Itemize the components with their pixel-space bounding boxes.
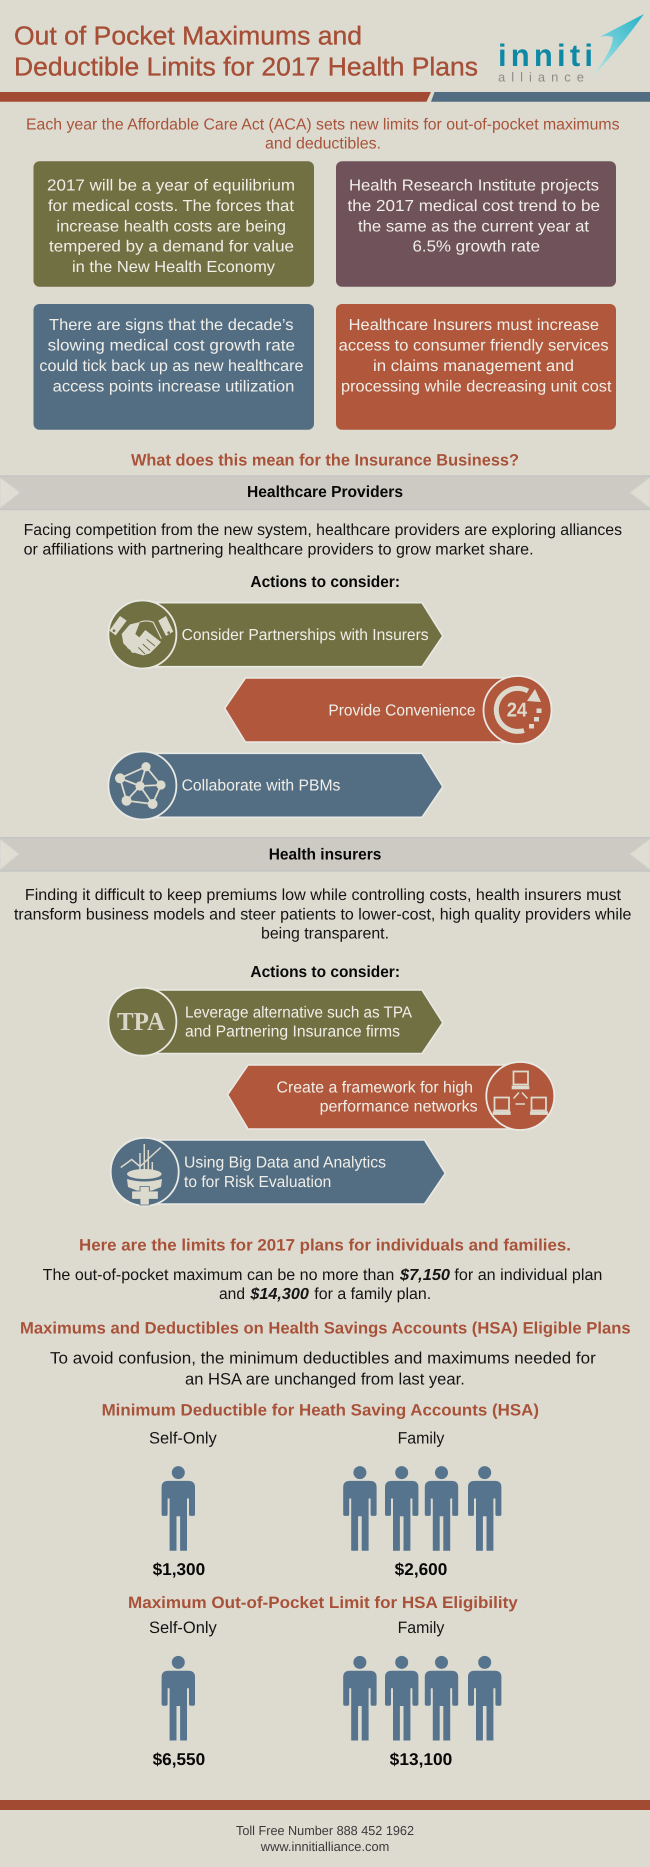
arrow: TPA: Leverage alternative such as TPA — [185, 1004, 412, 1021]
footer contact: www.innitialliance.com — [260, 1839, 389, 1854]
heading: minimum deductible: Minimum Deductible for Heath Saving Accounts (HSA) — [102, 1402, 539, 1420]
arrow: TPA: and Partnering Insurance firms — [185, 1024, 400, 1041]
arrow: framework — [228, 1062, 554, 1130]
heading: maximum out-of-pocket limit: Maximum Out-of-Pocket Limit for HSA Eligibility — [128, 1594, 519, 1612]
icon: connected computers — [493, 1072, 548, 1115]
text: providers description: or affiliations with partnering healthcare providers to grow market share. — [24, 542, 534, 559]
icon: handshake — [109, 616, 173, 655]
header divider bar — [0, 92, 650, 102]
arrow: convenience: Provide Convenience — [328, 702, 476, 719]
chart: maximum limit family — [343, 1619, 501, 1769]
chart: maximum limit family: Family — [398, 1619, 445, 1637]
text: insurers description: Finding it difficult to keep premiums low while controlling costs, health insurers must — [25, 887, 622, 904]
panel: equilibrium: increase health costs are being — [56, 218, 286, 235]
arrow: TPA — [108, 988, 443, 1056]
heading: limits for 2017 plans: Here are the limits for 2017 plans for individuals and families. — [79, 1236, 571, 1254]
panel: equilibrium: in the New Health Economy — [72, 259, 275, 276]
arrow: big data: Using Big Data and Analytics — [184, 1155, 386, 1172]
chart: maximum limit self-only — [149, 1619, 218, 1769]
logo: inniti alliance — [498, 14, 644, 85]
arrow: partnerships: Consider Partnerships with Insurers — [182, 627, 429, 644]
heading: actions to consider: Actions to consider: — [250, 574, 400, 591]
chart: minimum deductible family — [343, 1429, 501, 1579]
panel: insurers — [336, 304, 616, 430]
panel: research institute: Health Research Institute projects — [349, 178, 599, 195]
banner: healthcare providers: Healthcare Providers — [247, 484, 403, 501]
chart: maximum limit family: $13,100 — [390, 1750, 452, 1769]
text: out-of-pocket maximums: for a family plan. — [314, 1286, 431, 1303]
chart: minimum deductible self-only — [149, 1429, 218, 1579]
text: avoid confusion: To avoid confusion, the minimum deductibles and maximums needed for — [50, 1350, 596, 1368]
panel: insurers: Healthcare Insurers must increase — [349, 317, 599, 334]
chart: minimum deductible family: $2,600 — [395, 1560, 447, 1579]
icon: analytics — [121, 1144, 162, 1205]
panel: research institute: 6.5% growth rate — [412, 239, 540, 256]
arrow: PBMs: Collaborate with PBMs — [182, 778, 340, 795]
arrow: PBMs — [108, 752, 443, 820]
text: out-of-pocket maximums: $14,300 — [249, 1286, 309, 1303]
arrow: partnerships — [108, 600, 443, 668]
arrow: convenience — [225, 676, 551, 744]
chart: maximum limit self-only: $6,550 — [153, 1750, 205, 1769]
banner: health insurers: Health insurers — [269, 846, 381, 863]
panel: insurers: in claims management and — [373, 358, 574, 375]
text: avoid confusion — [50, 1350, 596, 1388]
panel: equilibrium — [34, 161, 314, 287]
banner: health insurers — [0, 838, 650, 871]
text: avoid confusion: an HSA are unchanged from last year. — [185, 1370, 465, 1388]
panel: insurers: access to consumer friendly services — [339, 338, 609, 355]
panel: slowing growth: access points increase utilization — [53, 379, 294, 396]
chart: maximum limit self-only: Self-Only — [149, 1619, 218, 1637]
text: providers description: Facing competition from the new system, healthcare providers are exploring alliances — [24, 522, 622, 539]
footer contact: Toll Free Number 888 452 1962 — [236, 1823, 414, 1838]
panel: research institute: the 2017 medical cost trend to be — [348, 198, 600, 215]
footer bar — [0, 1800, 650, 1810]
arrow: framework: performance networks — [320, 1099, 478, 1116]
footer contact — [236, 1823, 414, 1854]
text: providers description — [24, 522, 622, 559]
panel: research institute: the same as the current year at — [358, 218, 590, 235]
title: Deductible Limits for 2017 Health Plans — [14, 52, 478, 82]
intro text — [26, 116, 620, 152]
panel: slowing growth: could tick back up as new healthcare — [39, 358, 304, 375]
intro text: Each year the Affordable Care Act (ACA) sets new limits for out-of-pocket maximums — [26, 116, 620, 133]
arrow: big data — [111, 1138, 445, 1206]
text: out-of-pocket maximums: The out-of-pocket maximum can be no more than — [43, 1267, 394, 1284]
title — [14, 20, 478, 82]
logo: inniti alliance: alliance — [498, 70, 584, 85]
panel: equilibrium: 2017 will be a year of equilibrium — [47, 178, 295, 195]
icon: 24 hour clock: 24 — [507, 700, 528, 722]
arrow: big data: to for Risk Evaluation — [184, 1174, 331, 1191]
icon: 24 hour clock — [496, 688, 542, 731]
text: insurers description: transform business models and steer patients to lower-cost, high quality providers while — [14, 906, 631, 923]
arrow: framework: Create a framework for high — [276, 1079, 473, 1096]
panel: slowing growth: There are signs that the decade’s — [49, 317, 294, 334]
panel: equilibrium: for medical costs. The forces that — [48, 198, 295, 215]
panel: insurers: processing while decreasing unit cost — [341, 379, 612, 396]
logo: inniti alliance: inniti — [498, 38, 593, 73]
heading: actions to consider: Actions to consider: — [250, 964, 400, 981]
panel: slowing growth: slowing medical cost growth rate — [48, 338, 295, 355]
chart: minimum deductible self-only: Self-Only — [149, 1429, 218, 1447]
icon: TPA: TPA — [117, 1007, 165, 1036]
text: out-of-pocket maximums: $7,150 — [399, 1267, 450, 1284]
icon: network nodes — [115, 762, 166, 809]
banner: healthcare providers — [0, 476, 650, 510]
text: out-of-pocket maximums: and — [219, 1286, 245, 1303]
panel: research institute — [336, 161, 616, 287]
heading: HSA eligible plans: Maximums and Deductibles on Health Savings Accounts (HSA) Eligible Plans — [20, 1320, 631, 1338]
text: out-of-pocket maximums — [43, 1267, 602, 1303]
heading: insurance business: What does this mean for the Insurance Business? — [131, 452, 519, 470]
intro text: and deductibles. — [265, 135, 381, 152]
panel: equilibrium: tempered by a demand for value — [49, 239, 294, 256]
text: insurers description: being transparent. — [261, 926, 389, 943]
chart: minimum deductible self-only: $1,300 — [153, 1560, 205, 1579]
panel: slowing growth — [34, 304, 314, 430]
chart: minimum deductible family: Family — [398, 1429, 445, 1447]
text: insurers description — [14, 887, 631, 943]
title: Out of Pocket Maximums and — [14, 20, 362, 50]
text: out-of-pocket maximums: for an individual plan — [454, 1267, 602, 1284]
